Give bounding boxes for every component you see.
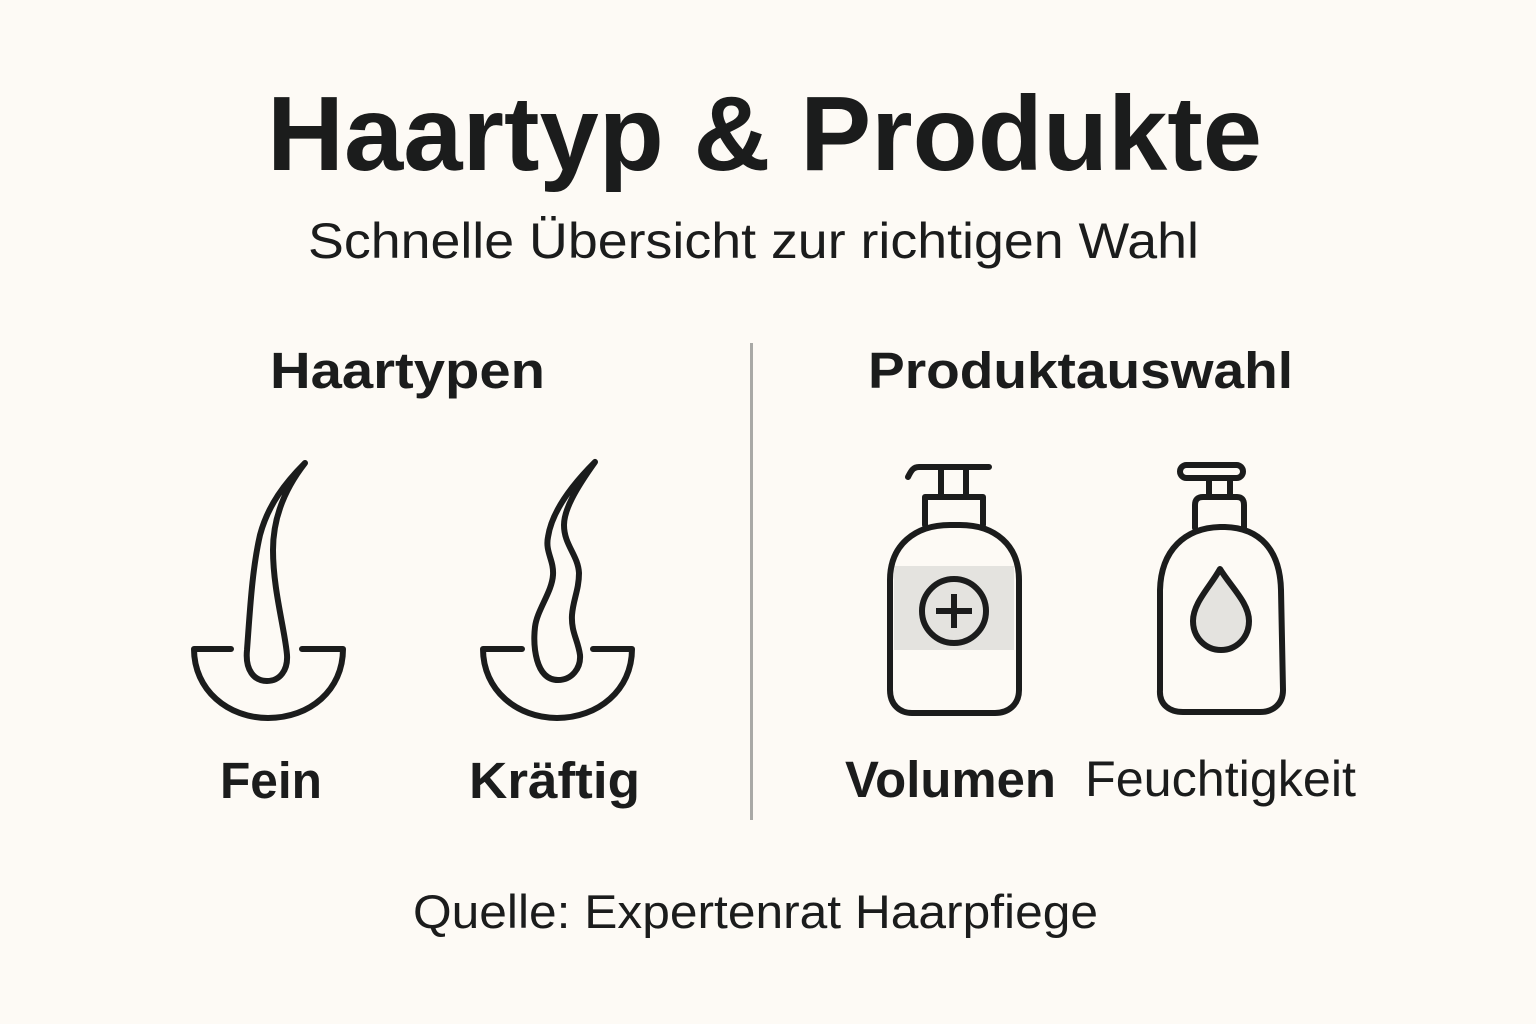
heading: Haartypen: Haartypen: [270, 342, 545, 399]
icon: volume bottle: [890, 467, 1019, 713]
icon: fine hair: [194, 463, 343, 718]
heading: Produktauswahl: Produktauswahl: [868, 342, 1293, 399]
title: Haartyp & Produkte: [267, 75, 1262, 193]
label: Kräftig: Kräftig: [469, 752, 640, 809]
bottle label band: [894, 566, 1014, 650]
icon: moisture bottle: [1160, 465, 1283, 712]
label: Fein: Fein: [220, 752, 322, 809]
source: Quelle: Expertenrat Haarpfiege: [413, 885, 1098, 938]
subtitle: Schnelle Übersicht zur richtigen Wahl: [308, 213, 1199, 269]
vertical divider: [750, 343, 753, 820]
icon: strong hair: [483, 462, 632, 718]
water drop: [1193, 569, 1249, 650]
label: Volumen: Volumen: [845, 751, 1056, 808]
label: Feuchtigkeit: Feuchtigkeit: [1085, 751, 1356, 807]
